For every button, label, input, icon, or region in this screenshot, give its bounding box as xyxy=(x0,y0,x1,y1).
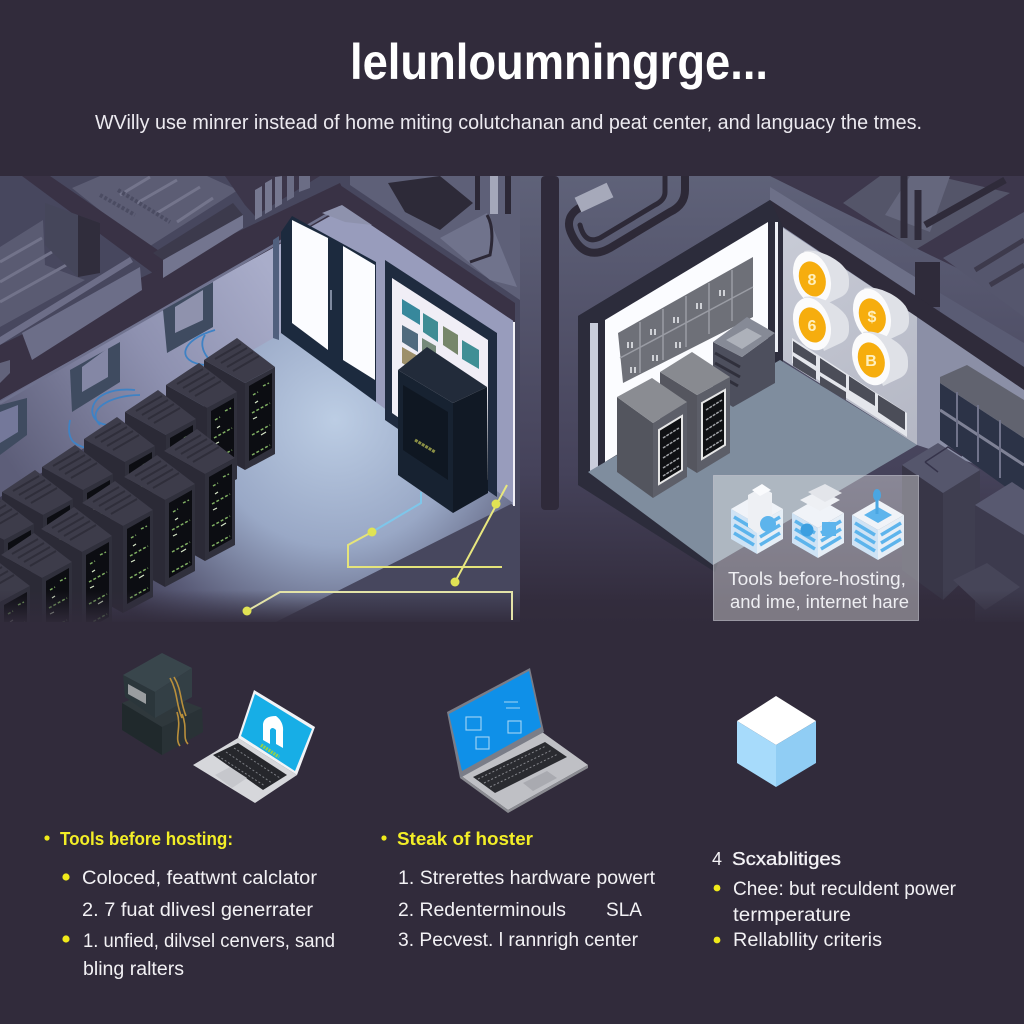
main right beam xyxy=(578,200,1024,390)
coins: 6 xyxy=(808,318,817,335)
coins: $ xyxy=(868,309,877,326)
glass callout card: and ime, internet hare xyxy=(730,592,909,612)
grey rack C xyxy=(713,317,775,407)
column 1: tools before hosting: bling ralters xyxy=(83,959,184,980)
column 2: steak of hoster: Steak of hoster xyxy=(397,829,533,849)
right room wall xyxy=(311,216,513,505)
central dark pillar xyxy=(541,176,559,510)
right wall of data center xyxy=(783,227,1024,480)
column 2: steak of hoster: SLA xyxy=(606,900,642,921)
shelf of blue servers xyxy=(940,365,1024,500)
column 1: tools before hosting: 2. 7 fuat dlivesl generrater xyxy=(82,900,314,921)
wall picture with thumbnails xyxy=(385,260,497,497)
card caption: Tools before-hosting, xyxy=(728,569,906,589)
column 1: tools before hosting: Tools before hosting: xyxy=(60,829,233,849)
callout lines xyxy=(242,322,514,620)
column 3: scalability: Chee: but reculdent power xyxy=(733,879,957,900)
column 1: tools before hosting: 1. unfied, dilvsel cenvers, sand xyxy=(83,931,335,952)
column 2: steak of hoster: 3. Pecvest. l rannrigh center xyxy=(398,930,639,951)
column 3: scalability: Scxablitiges xyxy=(732,849,841,869)
wall panel row xyxy=(792,338,907,437)
room outer frame xyxy=(578,200,783,572)
wall windows xyxy=(0,282,213,455)
subtitle: WVilly use minrer instead of home miting colutchanan and peat center, and languacy the tmes. xyxy=(95,112,922,134)
upper right structure xyxy=(770,176,1024,367)
column 3: scalability: 4 xyxy=(712,849,722,869)
column 1: tools before hosting: Coloced, feattwnt calclator xyxy=(82,868,318,889)
wall monitor grid xyxy=(618,257,753,383)
coins: 8 xyxy=(808,272,817,289)
card icon: document cube xyxy=(792,484,844,558)
icon: server stack xyxy=(122,653,203,755)
card icon: pin cube xyxy=(852,489,904,560)
racks xyxy=(0,338,275,622)
column 2: steak of hoster: 1. Strerettes hardware powert xyxy=(398,868,656,889)
door xyxy=(273,216,376,402)
black server cabinet xyxy=(398,347,488,513)
icon: laptop with blue screen xyxy=(447,668,588,813)
column 3: scalability: Rellabllity criteris xyxy=(733,930,882,951)
title: lelunloumningrge... xyxy=(350,34,768,90)
pipes xyxy=(569,176,685,253)
right scene background xyxy=(520,176,1024,622)
white back wall xyxy=(605,222,768,462)
coins: B xyxy=(865,353,877,370)
room floor xyxy=(0,333,513,640)
column 2: steak of hoster xyxy=(381,829,656,951)
column 3: scalability xyxy=(712,849,957,951)
main ceiling beam xyxy=(0,183,350,400)
icon: laptop with home screen xyxy=(193,690,315,803)
upper floor machinery, left xyxy=(0,176,520,345)
icon: light blue cube xyxy=(737,696,816,787)
column 3: scalability: termperature xyxy=(733,905,851,926)
glass callout card xyxy=(714,476,918,620)
illustration: home mining room xyxy=(0,176,1024,622)
left room wall xyxy=(0,244,282,497)
grey rack B xyxy=(660,352,730,473)
lower right racks xyxy=(902,443,1024,622)
column 2: steak of hoster: 2. Redenterminouls xyxy=(398,900,566,921)
grey rack A xyxy=(617,378,687,498)
card icon: storage cube xyxy=(731,484,783,554)
column 1: tools before hosting xyxy=(44,829,335,980)
data center floor xyxy=(588,360,917,565)
blue cables xyxy=(69,330,228,448)
coins xyxy=(793,250,909,386)
